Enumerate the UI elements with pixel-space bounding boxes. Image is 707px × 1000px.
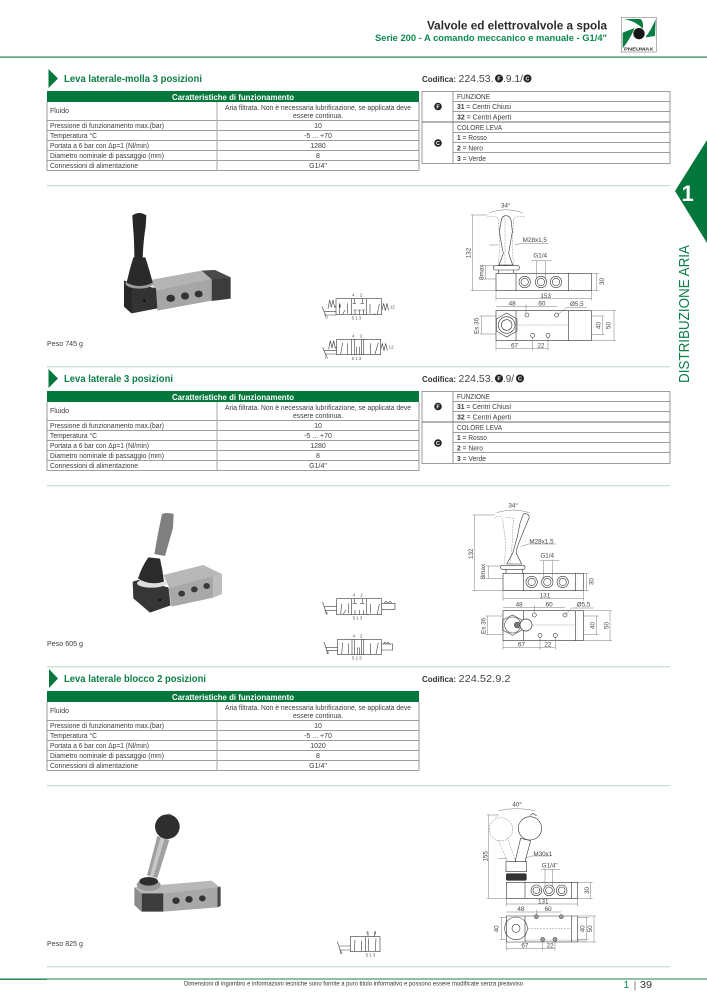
- table: characteristics: Pressione di funzionamento max.(bar): [50, 723, 164, 730]
- table: characteristics: -5 ... +70: [304, 433, 332, 440]
- subtitle: Serie 200 - A comando meccanico e manuale - G1/4": [375, 33, 607, 43]
- pneumatic symbol 3: 4: [366, 930, 369, 935]
- table: options: 2 = Nero: [457, 446, 483, 452]
- heading arrow: [49, 669, 58, 688]
- table: characteristics: Caratteristiche di funzionamento: [172, 393, 294, 402]
- technical drawing 3: 50: [587, 925, 594, 932]
- pneumatic symbol 3: [337, 930, 380, 958]
- heading arrow: [48, 69, 58, 88]
- table: options: 32 = Centri Aperti: [457, 114, 511, 122]
- table: options: COLORE LEVA: [457, 425, 502, 432]
- pneumatic symbol 1a: [322, 293, 395, 320]
- table: characteristics: Aria filtrata. Non è necessaria lubrificazione, se applicata deve: [225, 405, 411, 412]
- technical drawing 3: 48: [517, 906, 525, 913]
- pneumatic symbol 2a: [323, 593, 395, 620]
- page number: 39: [640, 979, 652, 991]
- order code: .9.1/: [503, 73, 523, 85]
- technical drawing 2: 40: [590, 621, 597, 629]
- table: characteristics: G1/4": [309, 463, 327, 470]
- table: options: C: [436, 141, 440, 147]
- technical drawing 2: Ø5,5: [577, 601, 591, 608]
- table: characteristics: Aria filtrata. Non è necessaria lubrificazione, se applicata deve: [225, 705, 411, 712]
- table: characteristics: Fluido: [50, 108, 69, 115]
- table: characteristics: [47, 691, 419, 770]
- technical drawing 1: 22: [537, 342, 545, 349]
- table: characteristics: Connessioni di alimentazione: [50, 163, 138, 170]
- pneumatic symbol 1b: [323, 333, 394, 361]
- table: options: 31 = Centri Chiusi: [457, 104, 511, 111]
- technical drawing 3: 155: [482, 851, 489, 862]
- technical drawing 2: 30: [589, 577, 596, 585]
- table: characteristics: 1280: [310, 443, 326, 450]
- order code: [422, 673, 511, 685]
- technical drawing 3: G1/4": [542, 863, 558, 870]
- table: characteristics: 10: [314, 723, 322, 730]
- table: characteristics: 10: [314, 423, 322, 430]
- technical drawing 2: Es.36: [480, 617, 487, 634]
- table: options: F: [436, 104, 440, 110]
- technical drawing 2: 131: [540, 592, 551, 599]
- table: characteristics: Connessioni di alimentazione: [50, 763, 138, 770]
- technical drawing 1: 67: [511, 342, 519, 349]
- weight label: Peso 605 g: [47, 641, 83, 648]
- side label: DISTRIBUZIONE ARIA: [676, 245, 693, 383]
- table: options: 1 = Rosso: [457, 135, 487, 142]
- product photo 1: [124, 213, 231, 313]
- technical drawing 3: 30: [584, 886, 591, 894]
- technical drawing 3: 60: [545, 906, 552, 913]
- technical drawing 1: 50: [605, 321, 612, 329]
- technical drawing 1: 60: [538, 301, 546, 308]
- technical drawing 1: 34°: [501, 201, 511, 209]
- pneumatic symbol 1b: b: [325, 355, 328, 360]
- technical drawing 2: [468, 501, 612, 650]
- table: characteristics: 10: [314, 123, 322, 130]
- heading: Leva laterale blocco 2 posizioni: [64, 674, 206, 685]
- order code: C: [526, 76, 530, 82]
- technical drawing 2: M28x1,5: [529, 538, 554, 545]
- technical drawing 1: 8max: [478, 264, 485, 280]
- heading: Leva laterale 3 posizioni: [64, 374, 173, 385]
- section 3: [47, 669, 511, 770]
- table: characteristics: 8: [316, 753, 320, 760]
- logo: Pneumax: PNEUMAX: [624, 46, 654, 51]
- technical drawing 3: 40: [494, 925, 501, 932]
- table: options: 3 = Verde: [457, 156, 486, 163]
- table: characteristics: Pressione di funzionamento max.(bar): [50, 423, 164, 430]
- header rule: [0, 56, 707, 58]
- technical drawing 1: Es.36: [474, 317, 481, 334]
- table: options: 31 = Centri Chiusi: [457, 404, 511, 411]
- order code: [422, 373, 524, 385]
- technical drawing 3: 22: [547, 942, 554, 949]
- order code: F: [497, 76, 501, 82]
- footer rule: [0, 978, 707, 980]
- technical drawing 2: 22: [544, 642, 552, 649]
- section 2: [47, 369, 670, 470]
- pneumatic symbol 2b: 4: [353, 633, 356, 638]
- page number: [624, 979, 652, 991]
- title: Valvole ed elettrovalvole a spola: [427, 18, 607, 32]
- table: options: COLORE LEVA: [457, 125, 502, 132]
- table: options: 3 = Verde: [457, 456, 486, 463]
- table: characteristics: 1020: [310, 743, 326, 750]
- technical drawing 2: 67: [518, 642, 526, 649]
- pneumatic symbol 2b: 2: [360, 633, 363, 638]
- technical drawing 3: 67: [521, 942, 529, 949]
- pneumatic symbol 1b: 4: [352, 333, 355, 338]
- table: characteristics: Caratteristiche di funzionamento: [172, 693, 294, 702]
- pneumatic symbol 2a: 5 1 3: [353, 615, 363, 620]
- footer note: Dimensioni di ingombro e informazioni tecniche sono fornite a puro titolo informativo e possono essere modificate senza preavviso: [184, 980, 524, 988]
- table: characteristics: essere continua.: [293, 413, 343, 420]
- technical drawing 3: 131: [538, 898, 549, 905]
- table: characteristics: G1/4": [309, 163, 327, 170]
- order code: 224.53.: [458, 373, 494, 385]
- table: options: 2 = Nero: [457, 146, 483, 152]
- table: characteristics: 8: [316, 453, 320, 460]
- technical drawing 1: 132: [465, 247, 472, 258]
- table: options: F: [436, 404, 440, 410]
- table: characteristics: G1/4": [309, 763, 327, 770]
- table: characteristics: Portata a 6 bar con Δp=1 (Nl/min): [50, 743, 149, 750]
- table: characteristics: Caratteristiche di funzionamento: [172, 93, 294, 102]
- table: characteristics: Fluido: [50, 708, 69, 715]
- technical drawing 3: M30x1: [533, 851, 553, 858]
- technical drawing 3: 40: [580, 925, 587, 932]
- technical drawing 2: 48: [516, 601, 523, 608]
- technical drawing 1: M28x1,5: [523, 237, 547, 244]
- technical drawing 1: 40: [595, 321, 602, 329]
- pneumatic symbol 2a: 2: [360, 593, 363, 598]
- table: characteristics: 1280: [310, 143, 326, 150]
- order code: C: [518, 376, 522, 382]
- weight label: Peso 825 g: [47, 941, 83, 948]
- technical drawing 1: Ø5,5: [570, 301, 584, 308]
- chapter tab: 1: [682, 181, 694, 206]
- table: options: C: [436, 441, 440, 447]
- table: characteristics: Connessioni di alimentazione: [50, 463, 138, 470]
- table: options: [422, 392, 670, 464]
- technical drawing 2: 132: [468, 548, 475, 559]
- table: characteristics: 8: [316, 153, 320, 160]
- table: characteristics: -5 ... +70: [304, 133, 332, 140]
- table: characteristics: essere continua.: [293, 113, 343, 120]
- technical drawing 2: 8max: [480, 563, 487, 579]
- technical drawing 2: 60: [546, 601, 553, 608]
- logo: Pneumax: [621, 17, 656, 52]
- technical drawing 3: 40°: [512, 801, 522, 809]
- order code: .9/: [503, 373, 514, 385]
- pneumatic symbol 3: 2: [374, 930, 377, 935]
- chapter tab: [675, 140, 707, 243]
- order code: Codifica:: [422, 375, 456, 384]
- table: characteristics: -5 ... +70: [304, 733, 332, 740]
- product photo 3: [134, 813, 221, 912]
- order code: Codifica:: [422, 675, 456, 684]
- order code: [422, 73, 532, 85]
- table: characteristics: Temperatura °C: [50, 732, 97, 740]
- table: characteristics: Temperatura °C: [50, 132, 97, 140]
- table: characteristics: Diametro nominale di passaggio (mm): [50, 753, 164, 760]
- table: options: 32 = Centri Aperti: [457, 414, 511, 422]
- pneumatic symbol 2a: b: [325, 611, 328, 616]
- technical drawing 1: G1/4: [533, 253, 548, 260]
- table: options: 1 = Rosso: [457, 435, 487, 442]
- technical drawing 2: 34°: [508, 501, 518, 509]
- page number: 1: [624, 979, 630, 991]
- table: characteristics: essere continua.: [293, 713, 343, 720]
- table: options: FUNZIONE: [457, 394, 490, 401]
- order code: 224.53.: [458, 73, 494, 85]
- technical drawing 2: 50: [603, 621, 610, 629]
- pneumatic symbol 1a: b: [325, 314, 328, 319]
- table: characteristics: Diametro nominale di passaggio (mm): [50, 153, 164, 160]
- pneumatic symbol 1a: 2: [360, 293, 363, 298]
- pneumatic symbol 1b: 5 1 3: [352, 356, 362, 361]
- table: characteristics: [47, 91, 419, 170]
- order code: 224.52.9.2: [458, 673, 511, 685]
- pneumatic symbol 3: 5 1 3: [366, 953, 376, 958]
- table: options: [422, 92, 670, 164]
- order code: Codifica:: [422, 75, 456, 84]
- product photo 2: [133, 513, 222, 613]
- pneumatic symbol 2a: 4: [353, 593, 356, 598]
- pneumatic symbol 1a: 5 1 3: [352, 315, 362, 320]
- weight label: Peso 745 g: [47, 341, 83, 348]
- technical drawing 3: [482, 801, 596, 950]
- table: characteristics: Temperatura °C: [50, 432, 97, 440]
- pneumatic symbol 2b: b: [327, 650, 330, 655]
- pneumatic symbol 1b: 2: [360, 333, 363, 338]
- table: characteristics: Diametro nominale di passaggio (mm): [50, 453, 164, 460]
- pneumatic symbol 1b: 12: [389, 344, 394, 349]
- table: characteristics: [47, 391, 419, 470]
- section 1: [47, 69, 670, 170]
- pneumatic symbol 2b: [324, 633, 393, 660]
- technical drawing 1: 153: [540, 293, 551, 300]
- pneumatic symbol 3: b: [340, 950, 343, 955]
- table: options: FUNZIONE: [457, 94, 490, 101]
- table: characteristics: Portata a 6 bar con Δp=1 (Nl/min): [50, 143, 149, 150]
- pneumatic symbol 1a: 4: [352, 293, 355, 298]
- order code: F: [497, 376, 501, 382]
- heading: Leva laterale-molla 3 posizioni: [64, 74, 202, 85]
- table: characteristics: Aria filtrata. Non è necessaria lubrificazione, se applicata deve: [225, 105, 411, 112]
- heading arrow: [48, 369, 58, 388]
- technical drawing 2: G1/4: [540, 553, 555, 560]
- pneumatic symbol 2b: 5 1 3: [352, 655, 362, 660]
- technical drawing 1: 48: [509, 301, 516, 308]
- technical drawing 1: [465, 201, 616, 351]
- table: characteristics: Pressione di funzionamento max.(bar): [50, 123, 164, 130]
- technical drawing 1: 30: [599, 277, 606, 285]
- pneumatic symbol 1a: 12: [390, 304, 395, 309]
- table: characteristics: Fluido: [50, 408, 69, 415]
- table: characteristics: Portata a 6 bar con Δp=1 (Nl/min): [50, 443, 149, 450]
